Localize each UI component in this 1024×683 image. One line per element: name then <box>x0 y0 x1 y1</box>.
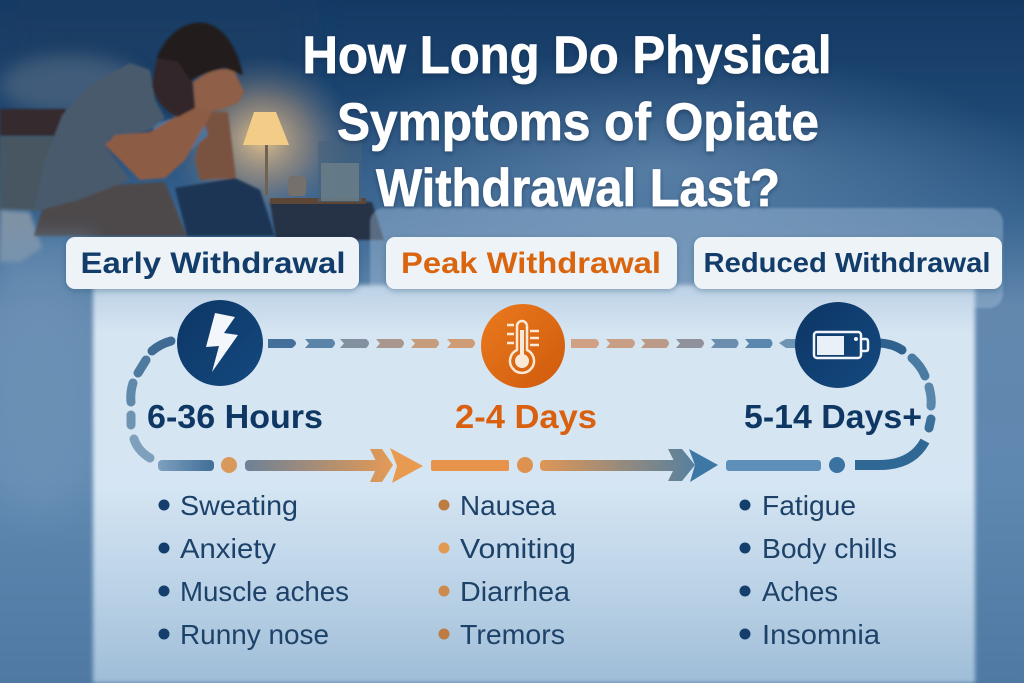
symptom list: peak withdrawal <box>438 490 576 650</box>
bottom timeline row <box>158 448 845 483</box>
nightstand <box>270 202 384 240</box>
header: reduced withdrawal <box>694 237 1002 289</box>
arrow 2 <box>540 449 695 481</box>
header: early withdrawal: Early Withdrawal <box>80 247 346 280</box>
header: peak withdrawal: Peak Withdrawal <box>401 247 661 280</box>
pillows <box>0 136 54 210</box>
symptom list: reduced withdrawal: Fatigue <box>762 490 856 521</box>
symptom list: reduced withdrawal: Insomnia <box>762 619 880 650</box>
left wall light <box>0 55 140 115</box>
icon: lightning bolt <box>177 300 263 386</box>
symptom list: early withdrawal <box>158 490 349 650</box>
headboard <box>0 109 66 136</box>
duration: 6-36 hours: 6-36 Hours <box>147 398 323 435</box>
glass of water <box>318 141 362 202</box>
lamp <box>243 112 289 195</box>
arrowhead 2 <box>689 449 718 482</box>
right curve dashes <box>880 343 931 428</box>
man <box>33 23 275 236</box>
arrow 1 <box>245 449 393 482</box>
title: Withdrawal Last? <box>376 159 780 218</box>
bottom right curve <box>855 441 925 465</box>
shirt peek <box>150 110 208 160</box>
title: How Long Do Physical <box>302 26 832 85</box>
segment 1 <box>158 460 214 471</box>
duration: 5-14 days+: 5-14 Days+ <box>744 398 922 435</box>
segment 2 <box>431 460 509 471</box>
hair <box>157 23 243 80</box>
bedside clutter <box>288 176 306 196</box>
symptom list: peak withdrawal: Vomiting <box>460 533 576 564</box>
duration: 2-4 days: 2-4 Days <box>455 398 597 435</box>
symptom list: reduced withdrawal <box>740 490 897 650</box>
bed sheet <box>0 210 42 262</box>
symptom list: peak withdrawal: Nausea <box>460 490 556 521</box>
symptom list: reduced withdrawal: Aches <box>762 576 838 607</box>
title: Symptoms of Opiate <box>337 93 819 152</box>
symptom list: early withdrawal: Anxiety <box>180 533 276 564</box>
symptom list: early withdrawal: Sweating <box>180 490 298 521</box>
lamp glow <box>167 55 357 225</box>
symptom list: early withdrawal: Runny nose <box>180 619 329 650</box>
dark wall <box>0 0 300 120</box>
top dashes blue to orange <box>268 339 800 348</box>
main timeline panel <box>93 285 975 683</box>
symptom list: early withdrawal: Muscle aches <box>180 576 349 607</box>
photo: man sitting on bed with bedside lamp <box>0 0 384 262</box>
dot 3 <box>829 457 845 473</box>
title <box>302 26 832 218</box>
soft fade between photo and panel <box>0 235 93 295</box>
header: reduced withdrawal: Reduced Withdrawal <box>704 247 990 278</box>
symptom list: peak withdrawal: Tremors <box>460 619 565 650</box>
header: early withdrawal <box>66 237 359 289</box>
jeans <box>175 178 275 236</box>
arrowhead 1 <box>390 448 423 483</box>
segment 3 <box>726 460 821 471</box>
hand <box>193 69 244 112</box>
forearm <box>105 105 212 180</box>
t-shirt <box>33 63 165 212</box>
dot 2 <box>517 457 533 473</box>
back forearm <box>195 112 236 180</box>
header: peak withdrawal <box>386 237 677 289</box>
dashed timeline loop <box>131 339 931 465</box>
face and beard <box>152 58 195 117</box>
faint upper panel band <box>370 208 1003 308</box>
dot 1 <box>221 457 237 473</box>
symptom list: peak withdrawal: Diarrhea <box>460 576 570 607</box>
symptom list: reduced withdrawal: Body chills <box>762 533 897 564</box>
icon: thermometer <box>481 304 565 388</box>
icon: low battery <box>795 302 881 388</box>
thigh <box>34 182 187 236</box>
left curve dashes <box>131 341 171 458</box>
